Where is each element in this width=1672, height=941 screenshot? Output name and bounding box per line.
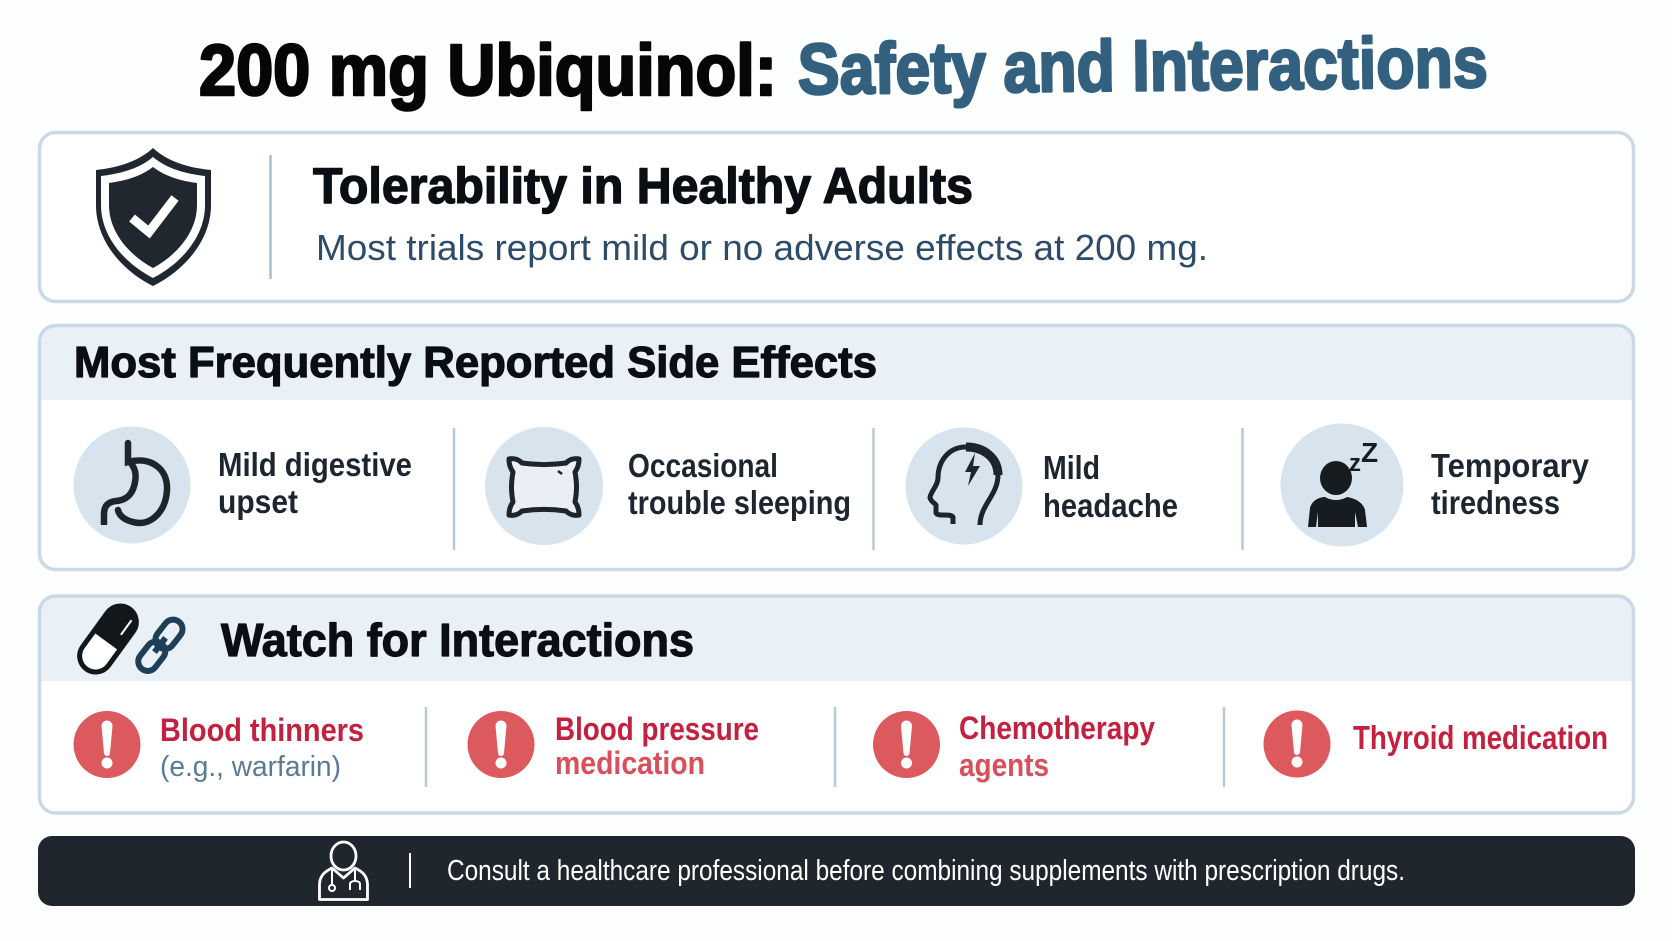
footer banner [38, 836, 1635, 906]
label: headache: Mild [1043, 449, 1100, 486]
icon: alert [74, 711, 140, 778]
label: headache [1043, 449, 1178, 524]
icon: shield with check [96, 148, 211, 286]
icon: sleepy person: Z [1361, 437, 1378, 468]
icon: sleepy person [1280, 424, 1404, 546]
icon: alert [873, 711, 940, 778]
label: chemotherapy agents: agents [959, 747, 1049, 783]
item: tiredness [1280, 424, 1590, 546]
label: warfarin example: (e.g., warfarin) [160, 751, 341, 783]
label: tiredness [1431, 447, 1590, 521]
icon: doctor [320, 842, 368, 900]
icon: alert [468, 711, 534, 778]
text: consult advice: Consult a healthcare professional before combining supplements with prescription drugs. [447, 855, 1405, 887]
heading: interactions: Watch for Interactions [221, 614, 694, 666]
icon: alert [1264, 710, 1330, 778]
label: chemotherapy agents [959, 710, 1155, 783]
label: digestive upset: Mild digestive [218, 446, 412, 483]
icon: sleepy person: z [1349, 450, 1361, 477]
label: thyroid medication: Thyroid medication [1353, 719, 1608, 756]
item: trouble sleeping [485, 427, 851, 545]
text: tolerability summary: Most trials report mild or no adverse effects at 200 mg. [316, 227, 1208, 268]
icon: head with lightning [906, 428, 1022, 544]
panel: side effects [40, 326, 1634, 570]
icon: pillow [485, 427, 603, 545]
item: chemotherapy agents [873, 710, 1155, 783]
panel: interactions [40, 596, 1634, 813]
panel: tolerability [40, 132, 1634, 302]
label: blood pressure medication: Blood pressure [555, 711, 759, 747]
icon: pill and chain link [73, 600, 186, 678]
item: blood pressure medication [468, 711, 759, 781]
label: trouble sleeping: Occasional [628, 447, 778, 484]
label: blood pressure medication [555, 711, 759, 781]
item: blood thinners [74, 711, 364, 783]
label: trouble sleeping [628, 447, 851, 521]
item: thyroid medication [1264, 710, 1608, 778]
item: digestive upset [74, 426, 412, 544]
label: tiredness: tiredness [1431, 484, 1560, 521]
title: 200 mg Ubiquinol: [199, 31, 777, 111]
label: digestive upset: upset [218, 483, 298, 520]
label: blood pressure medication: medication [555, 745, 705, 781]
title [199, 23, 1488, 111]
item: headache [906, 428, 1178, 544]
label: headache: headache [1043, 487, 1178, 524]
label: digestive upset [218, 446, 412, 520]
label: tiredness: Temporary [1431, 447, 1590, 484]
label: chemotherapy agents: Chemotherapy [959, 710, 1155, 746]
icon: stomach [74, 426, 190, 544]
heading: tolerability: Tolerability in Healthy Adults [313, 158, 973, 214]
label: trouble sleeping: trouble sleeping [628, 484, 851, 521]
heading: side effects: Most Frequently Reported Side Effects [74, 338, 877, 387]
title: Safety and Interactions [797, 23, 1488, 110]
label: blood thinners: Blood thinners [160, 712, 364, 748]
